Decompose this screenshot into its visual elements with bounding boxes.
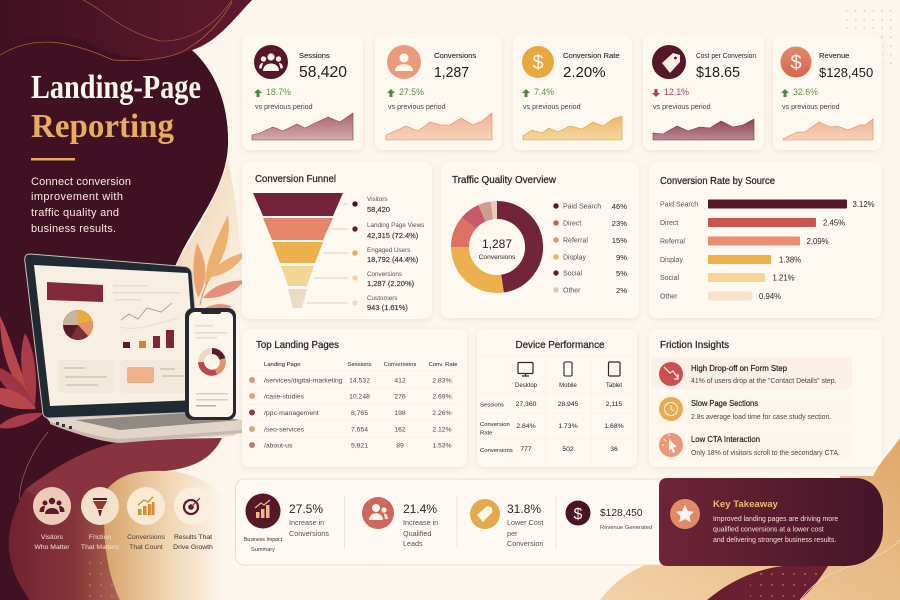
bar chart: 1.21% [772,274,795,282]
subtitle text: business results. [31,223,116,235]
table: 8,765 [351,410,368,417]
donut legend: 5% [616,269,627,278]
icon: visitors [33,487,71,525]
funnel labels: 18,792 (44.4%) [367,255,419,264]
icon: mobile: Mobile [559,383,577,389]
callout: key takeaway [659,478,883,566]
device table values: 36 [610,446,618,453]
metric: qualified leads: Qualified [403,529,431,538]
insight: slow page sections: Slow Page Sections [691,398,758,408]
subtitle text: improvement with [31,191,123,203]
funnel labels: 42,315 (72.4%) [367,231,419,240]
KPI card: conversion rate: 2.20% [563,64,606,81]
donut legend: 23% [612,219,627,228]
funnel labels: 943 (1.61%) [367,303,408,312]
metric: lower cost [470,499,543,548]
funnel labels: Visitors [367,196,388,203]
donut legend: 2% [616,286,627,295]
title: Landing-Page [31,69,201,106]
panel: device performance [477,329,637,467]
laptop illustration [25,254,242,443]
device table values: 502 [562,446,574,453]
donut legend: Display [563,254,586,262]
bar chart: Referral [660,238,685,246]
panel: conversion rate by source [649,162,882,318]
metric: revenue generated [566,500,652,531]
donut legend: Paid Search [563,204,601,210]
title [31,69,201,145]
KPI card: sessions: Sessions [299,51,330,60]
table: Sessions [348,362,372,368]
panel: top landing pages [242,329,467,467]
table: 10,248 [349,394,370,400]
donut legend: Other [563,288,581,294]
KPI card: sessions [242,35,363,150]
heading: conversion rate by source: Conversion Rate by Source [660,175,775,187]
KPI card: conversion rate: $ [532,52,544,74]
device table values [480,401,624,454]
metric: qualified leads [362,497,438,548]
donut legend: 46% [612,202,627,211]
icon: orange leaves [193,215,246,312]
KPI card: revenue: $128,450 [819,65,873,80]
icon: mobile [559,362,577,389]
bar chart: Paid Search [660,202,698,208]
metric: revenue generated: Revenue Generated [600,525,652,531]
icon: tablet [606,362,622,389]
donut center label: 1,287 [482,237,512,251]
bar chart: 1.38% [779,256,801,264]
KPI card: cost per conversion: Cost per Conversion [696,53,756,60]
device table values: Conversions [480,448,513,454]
insight: slow page sections: 2.8s average load time for case study section. [691,414,831,421]
device table values: 2,115 [606,401,622,408]
table: 14,532 [349,378,370,384]
bottom-left icon row [33,487,213,551]
insight: high drop-off: 41% of users drop at the "Contact Details" step. [691,378,837,385]
KPI card: conversions: 27.5% [399,87,424,97]
icon labels [34,534,213,551]
panel: business impact summary [236,479,676,565]
bar chart: Social [660,275,680,282]
table [246,362,462,450]
metric: revenue generated: $ [574,506,583,523]
heading: device performance: Device Performance [516,339,605,351]
metric: lower cost: per [507,529,518,538]
donut legend: 15% [612,236,627,245]
funnel labels: Conversions [367,271,402,278]
title rule [31,158,75,160]
bar chart [660,200,875,301]
KPI card: conversion rate: 7.4% [534,87,554,97]
KPI card: cost per conversion: $18.65 [696,65,740,81]
icon labels: Visitors [41,534,64,541]
funnel labels: Customers [367,295,397,302]
icon: target [174,487,212,525]
table: 2.12% [432,426,452,434]
metric: increase in conversions: 27.5% [289,502,323,516]
table: 1.53% [432,442,452,450]
bar chart: 2.45% [823,218,845,228]
table: 276 [394,394,406,400]
icon labels: Who Matter [34,544,70,551]
funnel labels [367,196,424,312]
donut legend: Social [563,270,583,278]
metric: increase in conversions: Business Impact [244,537,283,543]
metric: increase in conversions: Conversions [289,529,329,538]
panel: traffic quality overview [441,162,639,318]
donut legend: 9% [616,253,627,262]
metric: lower cost: Lower Cost [507,518,543,527]
subtitle text: traffic quality and [31,207,119,219]
bar chart: Display [660,257,683,264]
KPI card: revenue: 32.6% [793,87,818,97]
callout: key takeaway: Key Takeaway [713,499,779,510]
funnel labels: 58,420 [367,205,390,214]
donut center label: Conversions [479,254,516,261]
donut center label [479,237,516,261]
table: /seo-services [264,426,305,434]
metric: increase in conversions: Summary [251,547,275,553]
metric: qualified leads: 21.4% [403,502,437,516]
background: bottom-right tan shape [600,438,900,600]
funnel labels: 1,287 (2.20%) [367,279,415,288]
table: 89 [396,442,404,450]
icon: conversions chart [127,487,165,525]
heading: top landing pages: Top Landing Pages [256,339,339,351]
bar chart: 0.94% [759,292,781,301]
phone illustration [185,308,236,420]
KPI card: revenue: vs previous period [782,103,840,111]
background: bottom red wave [8,438,240,600]
table: 162 [394,426,406,434]
donut legend: Referral [563,238,588,244]
insight: low cta interaction [651,429,852,461]
table: Landing Page [264,362,301,368]
KPI card: sessions: 18.7% [266,87,291,97]
KPI card: cost per conversion [643,35,764,150]
KPI card: cost per conversion: vs previous period [653,103,711,111]
insight: slow page sections [651,393,852,425]
KPI card: sessions: 58,420 [299,64,347,81]
device table values: 777 [520,446,532,453]
KPI card: cost per conversion: 12.1% [664,87,689,97]
metric: qualified leads: Increase in [403,518,438,527]
metric: increase in conversions: Increase in [289,518,324,527]
icon: desktop [515,362,538,389]
metric: lower cost: 31.8% [507,502,541,516]
table: 412 [394,378,406,384]
funnel labels: Landing Page Views [367,222,424,229]
insight: high drop-off: High Drop-off on Form Step [691,363,787,373]
panel: conversion funnel [242,162,432,319]
table: 5,821 [351,442,368,450]
table: /case-studies [264,394,305,400]
KPI card: conversion rate: vs previous period [523,103,581,111]
insight: low cta interaction: Low CTA Interaction [691,434,760,444]
device table values: 1.73% [558,423,578,430]
icon labels: Drive Growth [173,544,213,551]
device table values: Conversion [480,422,510,428]
panel: friction insights [649,329,882,467]
table: 2.83% [432,378,452,384]
device table values: 1.68% [604,423,624,430]
icon labels: Results That [174,534,212,541]
table: /about-us [264,442,293,450]
KPI card: sessions: vs previous period [255,103,313,111]
device table values: Rate [480,430,493,436]
KPI card: conversion rate: Conversion Rate [563,51,620,60]
table: 2.26% [432,410,452,417]
KPI card: conversions [375,35,502,150]
device table values: 28,945 [558,401,579,408]
insight: high drop-off [651,357,852,389]
subtitle text: Connect conversion [31,176,131,188]
icon: funnel [81,487,119,525]
table: /services/digital-marketing [264,378,343,384]
KPI card: revenue: Revenue [819,51,849,60]
icon: red leaves [0,316,44,428]
callout: key takeaway: and delivering stronger business results. [713,537,836,544]
title: Reporting [31,108,174,145]
KPI card: conversions: Conversions [434,51,476,60]
metric: increase in conversions [244,494,329,553]
metric: revenue generated: $128,450 [600,508,643,519]
bar chart: Direct [660,220,678,227]
icon labels: Friction [89,534,111,541]
bar chart: 3.12% [852,200,875,209]
table: 7,654 [351,426,368,434]
callout: key takeaway: qualified conversions at a lower cost [713,526,824,534]
heading: traffic quality: Traffic Quality Overview [452,174,556,186]
KPI card: conversion rate [513,35,632,150]
KPI card: conversions: 1,287 [434,64,469,81]
device table values: 27,360 [516,401,537,408]
insight: low cta interaction: Only 18% of visitors scroll to the secondary CTA. [691,450,840,457]
icon: tablet: Tablet [606,383,622,389]
icon labels: That Matters [81,544,120,551]
device table values: 2.84% [516,423,536,430]
background: peach blob behind leaves [177,160,242,320]
metric: lower cost: Conversion [507,539,543,548]
table: /ppc-management [264,410,319,417]
metric: qualified leads: Leads [403,539,423,548]
device table values: Sessions [480,402,504,408]
donut legend [553,202,627,295]
heading: conversion funnel: Conversion Funnel [255,173,336,185]
heading: friction insights: Friction Insights [660,339,729,351]
table: Conversions [384,362,416,368]
bar chart: Other [660,294,678,300]
funnel labels: Engaged Users [367,247,410,254]
KPI card: conversions: vs previous period [388,103,446,111]
table: 2.69% [432,394,452,400]
donut chart [460,210,534,284]
bar chart: 2.09% [806,237,829,246]
icon labels: That Count [129,544,163,551]
KPI card: revenue: $ [790,52,802,74]
background: maroon title shape [0,0,252,600]
icon: desktop: Desktop [515,383,538,389]
table: 198 [394,410,406,417]
table: Conv. Rate [428,362,458,368]
KPI card: revenue [773,35,882,150]
callout: key takeaway: Improved landing pages are driving more [713,516,838,523]
icon labels: Conversions [127,534,165,541]
donut legend: Direct [563,220,581,228]
funnel chart [253,193,358,308]
subtitle text [31,176,131,235]
